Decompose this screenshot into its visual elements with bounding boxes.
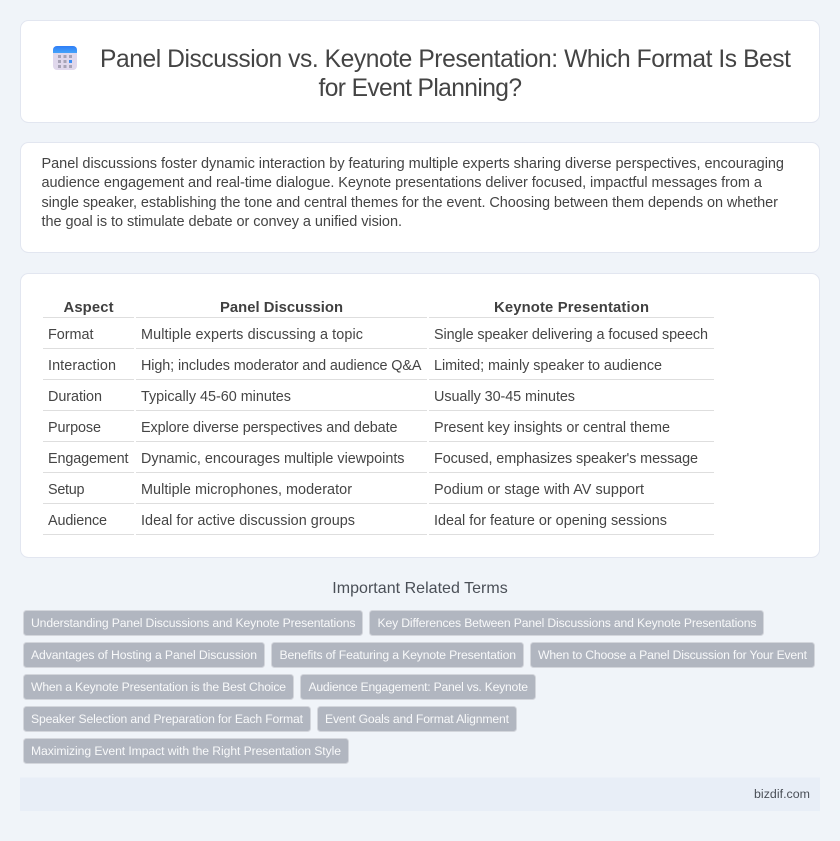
tag: Key Differences Between Panel Discussions and Keynote Presentations — [378, 616, 756, 630]
footer bar — [20, 778, 820, 811]
row: format: Multiple experts discussing a topic — [141, 327, 363, 343]
row: engagement — [43, 451, 714, 473]
row: audience: Ideal for active discussion groups — [141, 513, 355, 529]
tag: Speaker Selection and Preparation for Each Format — [31, 712, 304, 726]
tag — [24, 642, 264, 668]
tag — [370, 610, 764, 636]
row: duration: Duration — [48, 389, 102, 405]
tag: Advantages of Hosting a Panel Discussion — [31, 648, 257, 662]
tag — [318, 706, 516, 732]
title: for Event Planning? — [318, 75, 522, 102]
heading: important related terms: Important Related Terms — [332, 580, 508, 597]
introduction text: the goal is to stimulate debate or convey a unified vision. — [42, 214, 402, 230]
tag — [24, 674, 294, 700]
introduction text: Panel discussions foster dynamic interaction by featuring multiple experts sharing diverse perspectives, encouraging — [42, 156, 784, 172]
row: engagement: Engagement — [48, 451, 128, 467]
row: interaction: High; includes moderator and audience Q&A — [141, 358, 422, 374]
tag — [530, 642, 814, 668]
table header: Aspect — [64, 300, 114, 316]
row: setup: Setup — [48, 482, 84, 498]
panel: comparison table — [20, 274, 820, 558]
tag: Understanding Panel Discussions and Keynote Presentations — [31, 616, 356, 630]
title: Panel Discussion vs. Keynote Presentation: Which Format Is Best — [100, 46, 791, 73]
panel: title card — [20, 20, 820, 122]
tag — [272, 642, 524, 668]
tag — [300, 674, 536, 700]
row: interaction: Interaction — [48, 358, 116, 374]
tag — [24, 706, 310, 732]
table header: Keynote Presentation — [494, 300, 649, 316]
row: interaction: Limited; mainly speaker to audience — [434, 358, 662, 374]
row: audience: Ideal for feature or opening sessions — [434, 513, 667, 529]
row: setup: Podium or stage with AV support — [434, 482, 644, 498]
row: duration — [43, 389, 714, 411]
table header: Panel Discussion — [220, 300, 343, 316]
table header — [43, 300, 714, 318]
row: format: Single speaker delivering a focused speech — [434, 327, 708, 343]
tag — [24, 738, 348, 764]
footer source text: bizdif.com — [754, 787, 810, 801]
tag: Maximizing Event Impact with the Right Presentation Style — [31, 744, 341, 758]
panel: introduction — [20, 142, 820, 252]
tag — [24, 610, 362, 636]
row: purpose: Present key insights or central theme — [434, 420, 670, 436]
row: duration: Typically 45-60 minutes — [141, 389, 291, 405]
row: purpose — [43, 420, 714, 442]
introduction text — [42, 156, 784, 230]
row: format: Format — [48, 327, 94, 343]
tag: Benefits of Featuring a Keynote Presentation — [280, 648, 516, 662]
row: audience — [43, 513, 714, 535]
row: purpose: Explore diverse perspectives and debate — [141, 420, 398, 436]
row: setup: Multiple microphones, moderator — [141, 482, 352, 498]
row: engagement: Dynamic, encourages multiple viewpoints — [141, 451, 404, 467]
row: format — [43, 327, 714, 349]
icon: calendar — [53, 46, 77, 70]
panel: related term tags — [24, 610, 814, 764]
tag: When a Keynote Presentation is the Best Choice — [31, 680, 286, 694]
introduction text: single speaker, establishing the tone and central themes for the event. Choosing between them depends on whether — [42, 195, 778, 211]
tag: Event Goals and Format Alignment — [325, 712, 510, 726]
row: setup — [43, 482, 714, 504]
tag: When to Choose a Panel Discussion for Your Event — [538, 648, 808, 662]
row: audience: Audience — [48, 513, 107, 529]
tag: Audience Engagement: Panel vs. Keynote — [308, 680, 528, 694]
row: interaction — [43, 358, 714, 380]
row: engagement: Focused, emphasizes speaker's message — [434, 451, 698, 467]
introduction text: audience engagement and real-time dialogue. Keynote presentations deliver focused, impactful messages from a — [42, 175, 763, 191]
title — [100, 46, 791, 102]
row: purpose: Purpose — [48, 420, 101, 436]
row: duration: Usually 30-45 minutes — [434, 389, 575, 405]
